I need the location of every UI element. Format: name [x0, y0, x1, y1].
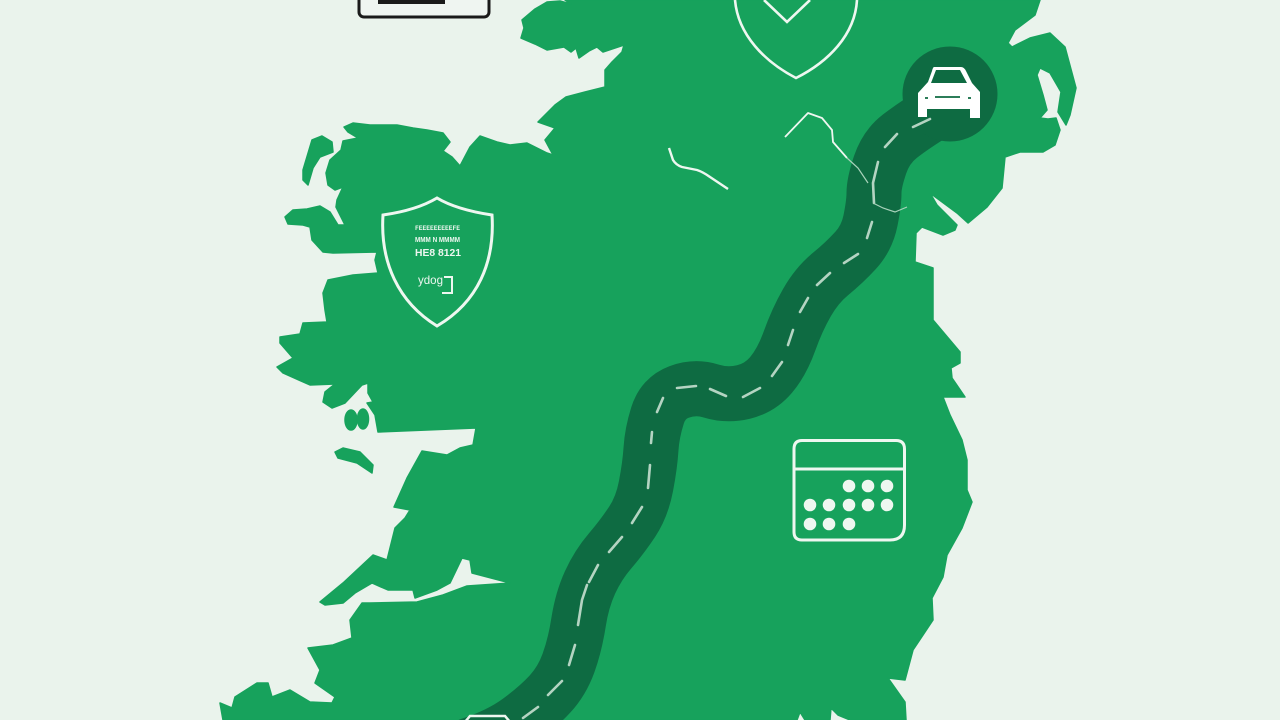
shield text: FEEEEEEEEEFE [415, 225, 460, 232]
mainland [220, 0, 1076, 720]
hook island north-west [303, 136, 333, 185]
icon: calendar [794, 440, 904, 540]
river: thin line over road [847, 158, 907, 212]
lower west island [335, 448, 373, 473]
check mark [764, 0, 810, 22]
calendar dots [804, 480, 893, 530]
second small west island [358, 409, 368, 429]
icon: top shield with check [735, 0, 857, 78]
icon: shield with text: ydog [418, 273, 443, 287]
small west islands [345, 410, 357, 430]
road [470, 100, 955, 720]
icon: shield with text [383, 198, 492, 326]
road surface [470, 100, 955, 720]
car body [918, 67, 980, 118]
icon: car marker [902, 46, 998, 142]
windscreen [931, 70, 967, 83]
road dashes leading to the car [885, 119, 930, 147]
road centre dashes [523, 162, 878, 718]
icon: shield with text: HE8 8121 [415, 248, 461, 259]
marker circle [902, 46, 998, 142]
shield signature stroke [442, 277, 452, 293]
river: western streak [669, 148, 728, 189]
icon: shield with text: MMM N MMMM [415, 237, 460, 244]
map of Ireland [220, 0, 1076, 720]
icon: cut-off licence card at top [359, 0, 489, 17]
icon: start marker at road end [465, 716, 510, 720]
car grille and lights [925, 97, 971, 98]
river: north line crossing the road [785, 113, 847, 158]
